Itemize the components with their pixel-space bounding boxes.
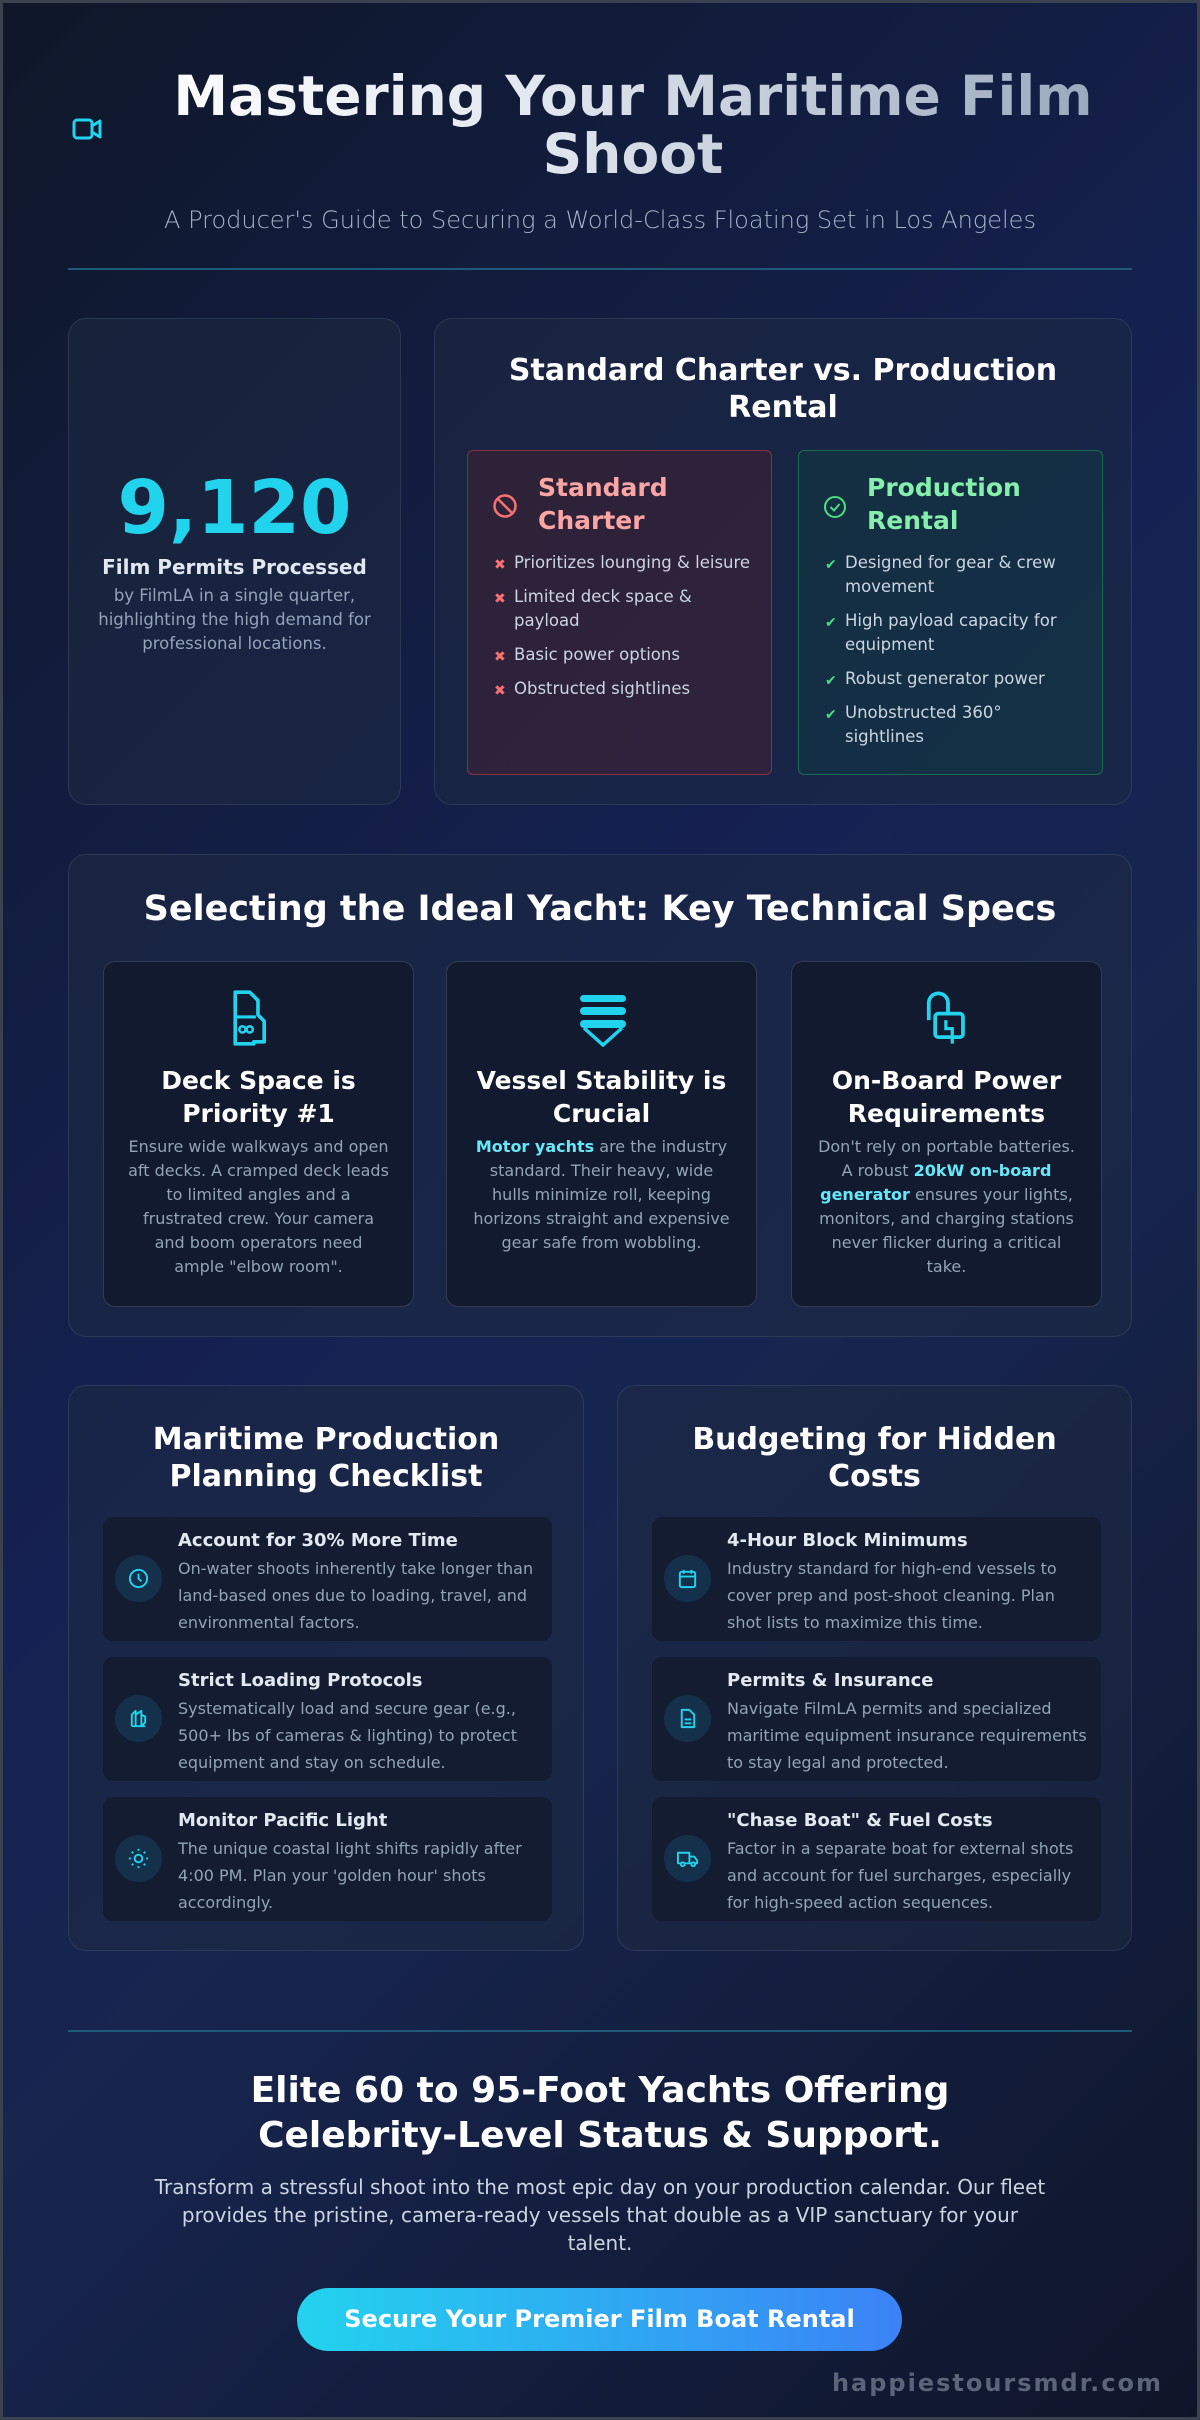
comparison heading [509,353,1057,425]
box: standard charter: Standard [538,473,668,502]
CTA button [297,2288,902,2351]
item: loading: Systematically load and secure gear (e.g., 500+ lbs of cameras & lighting) to protect equipment and stay on schedule. [178,1699,517,1772]
item: chase boat [652,1797,1101,1921]
box: standard charter: ✖ [494,557,506,573]
item: block minimums: Industry standard for high-end vessels to cover prep and post-shoot cleaning. Plan shot lists to maximize this time. [727,1559,1057,1632]
item: light [103,1797,552,1921]
box: production rental: Unobstructed 360° sightlines [845,703,1002,746]
box: production rental: ✔ [825,673,837,689]
item: loading [103,1657,552,1781]
card: deck space: Priority #1 [182,1099,335,1128]
panel: technical specs [68,854,1132,1337]
card: deck space: Ensure wide walkways and open aft decks. A cramped deck leads to limited angles and a frustrated crew. Your camera and boom operators need ample "elbow room". [128,1137,389,1276]
comparison heading: Rental [728,390,838,425]
checklist heading: Maritime Production [153,1422,499,1457]
box: standard charter: Basic power options [514,645,680,664]
budgeting heading: Budgeting for Hidden [692,1422,1057,1457]
icon: deck [233,990,266,1046]
item: light: The unique coastal light shifts rapidly after 4:00 PM. Plan your 'golden hour' shots accordingly. [178,1839,522,1912]
comparison heading: Standard Charter vs. Production [509,353,1057,388]
box: standard charter: Limited deck space & payload [514,587,692,630]
watermark: happiestoursmdr.com [832,2369,1163,2397]
title: Shoot [543,122,723,186]
panel: comparison [434,318,1132,805]
box: production rental: Rental [867,506,958,535]
card: power: On-Board Power [832,1066,1061,1095]
card: power [791,961,1102,1307]
panel: budgeting [617,1385,1132,1951]
budgeting heading [692,1422,1057,1494]
box: standard charter: Obstructed sightlines [514,679,690,698]
box: standard charter: Charter [538,506,645,535]
item: loading: Strict Loading Protocols [178,1670,422,1691]
checklist heading: Planning Checklist [169,1459,482,1494]
box: standard charter: Prioritizes lounging & leisure [514,553,750,572]
box: production rental: Robust generator power [845,669,1045,688]
item: block minimums: 4-Hour Block Minimums [727,1530,968,1551]
card: stability: Vessel Stability is [477,1066,726,1095]
item: time [103,1517,552,1641]
box: production rental: ✔ [825,707,837,723]
checklist heading [153,1422,499,1494]
card: deck space: Deck Space is [161,1066,356,1095]
stat label: Film Permits Processed [102,555,367,579]
stat description: by FilmLA in a single quarter, highlighting the high demand for professional locations. [98,586,371,653]
item: permits: Permits & Insurance [727,1670,934,1691]
CTA heading: Elite 60 to 95-Foot Yachts Offering [251,2070,949,2111]
icon: hull [580,995,626,1047]
card: stability: Crucial [553,1099,650,1128]
card: deck space [103,961,414,1307]
box: standard charter: ✖ [494,649,506,665]
CTA heading: Celebrity-Level Status & Support. [258,2115,942,2156]
card: stability [446,961,757,1307]
title: Mastering Your Maritime Film [173,64,1093,128]
box: production rental [798,450,1103,775]
specs heading: Selecting the Ideal Yacht: Key Technical Specs [144,889,1056,929]
box: standard charter: ✖ [494,591,506,607]
box: production rental: Designed for gear & crew movement [845,553,1056,596]
box: standard charter: ✖ [494,683,506,699]
box: production rental: ✔ [825,615,837,631]
subtitle: A Producer's Guide to Securing a World-Class Floating Set in Los Angeles [164,206,1036,234]
panel: stat [68,318,401,805]
CTA heading [251,2070,949,2156]
item: chase boat: Factor in a separate boat for external shots and account for fuel surcharges, especially for high-speed action sequences. [727,1839,1073,1912]
item: light: Monitor Pacific Light [178,1810,387,1831]
item: permits: Navigate FilmLA permits and specialized maritime equipment insurance requirements to stay legal and protected. [727,1699,1087,1772]
item: time: On-water shoots inherently take longer than land-based ones due to loading, travel, and environmental factors. [178,1559,533,1632]
item: permits [652,1657,1101,1781]
panel: checklist [68,1385,584,1951]
item: time: Account for 30% More Time [178,1530,458,1551]
CTA button: Secure Your Premier Film Boat Rental [344,2305,855,2333]
box: production rental: Production [867,473,1021,502]
box: production rental: ✔ [825,557,837,573]
card: power: Don't rely on portable batteries. A robust 20kW on-board generator ensures your lights, monitors, and charging stations never flicker during a critical take. [818,1137,1075,1276]
item: block minimums [652,1517,1101,1641]
card: power: Requirements [848,1099,1045,1128]
box: standard charter [467,450,772,775]
box: production rental: High payload capacity for equipment [845,611,1057,654]
card: stability: Motor yachts are the industry standard. Their heavy, wide hulls minimize roll, keeping horizons straight and expensive gear safe from wobbling. [473,1137,730,1252]
icon: video camera [72,118,102,140]
budgeting heading: Costs [828,1459,921,1494]
title [113,67,1153,183]
icon: power [926,992,965,1044]
CTA paragraph: Transform a stressful shoot into the most epic day on your production calendar. Our fleet provides the pristine, camera-ready vessels that double as a VIP sanctuary for your talent. [155,2175,1045,2255]
stat number: 9,120 [117,465,352,551]
item: chase boat: "Chase Boat" & Fuel Costs [727,1810,993,1831]
